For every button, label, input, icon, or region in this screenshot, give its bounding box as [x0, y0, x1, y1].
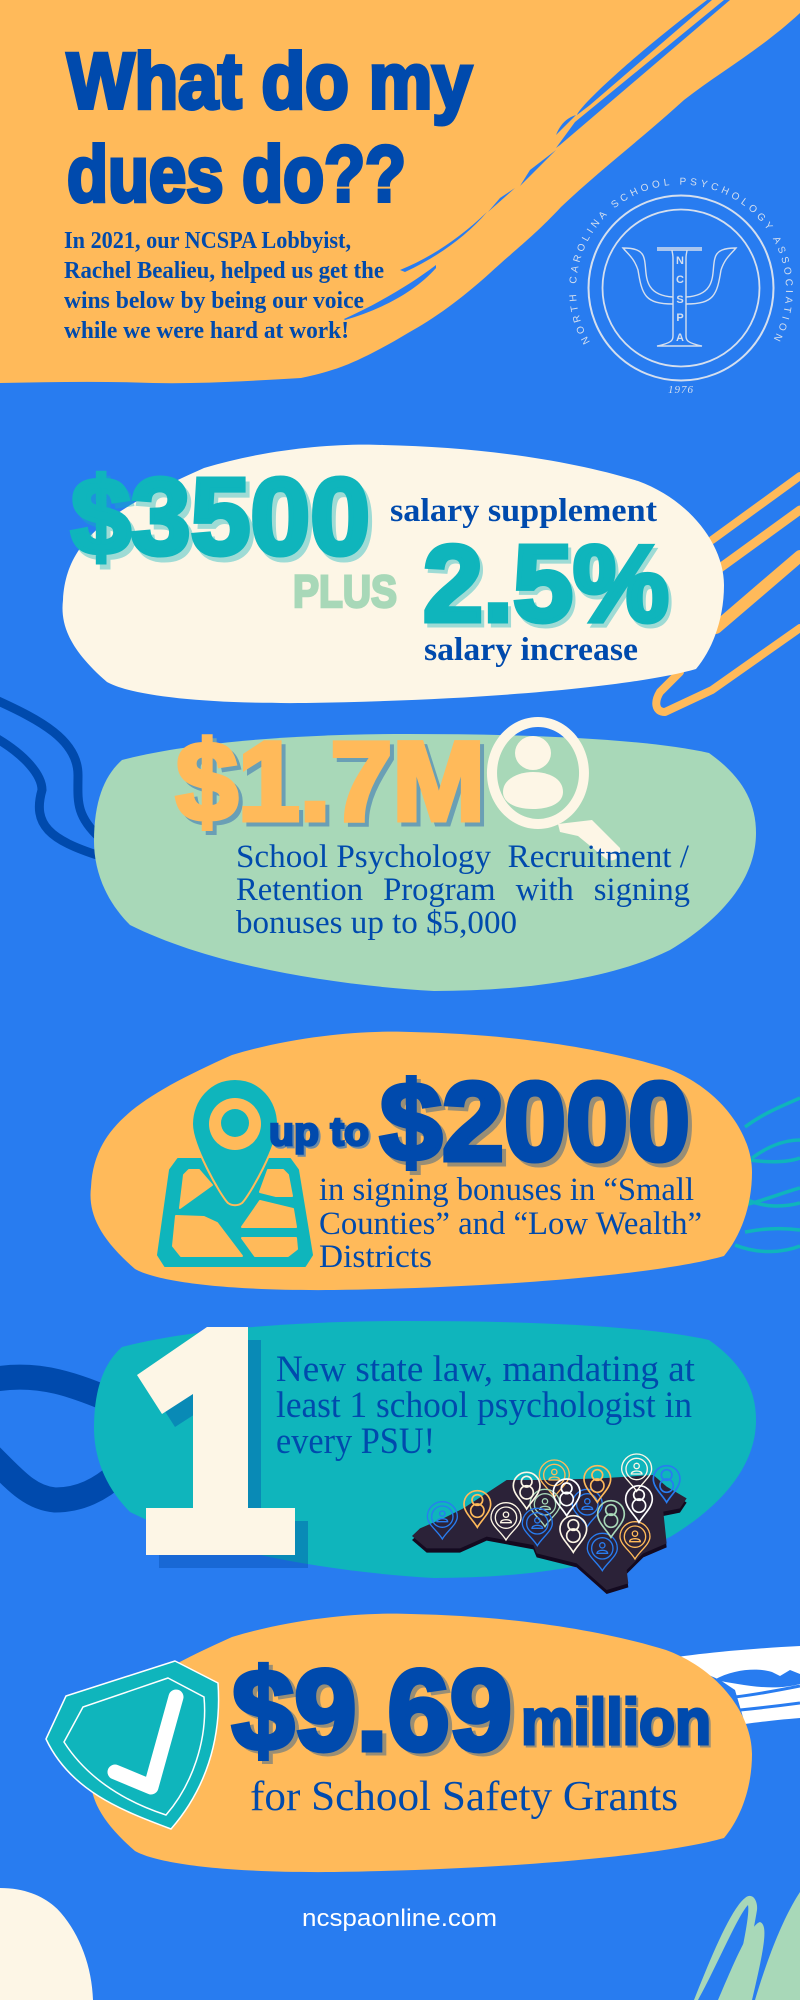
stat: $9.69: $9.69 [232, 1647, 512, 1775]
text: signing bonuses: Counties” and “Low Wealth” [319, 1206, 702, 1242]
intro text: while we were hard at work! [64, 318, 349, 344]
label: PLUS: PLUS [293, 566, 397, 617]
label: million: million [521, 1685, 711, 1758]
icon: magnifying glass with person [487, 717, 620, 860]
text: recruitment program: Retention Program with signing [236, 872, 690, 908]
decoration: white scribble [670, 1646, 800, 1724]
footer url: ncspaonline.com [302, 1905, 497, 1932]
text: recruitment program: bonuses up to $5,000 [236, 905, 517, 941]
text: signing bonuses: in signing bonuses in “Small [319, 1172, 694, 1208]
panel: school safety blob [91, 1614, 752, 1872]
logo: NCSPA seal: A [676, 332, 684, 344]
logo: NCSPA seal: 1976 [668, 384, 694, 396]
title [67, 36, 472, 218]
logo: NCSPA seal: N [676, 255, 684, 267]
stat: 2.5%: 2.5% [423, 523, 669, 645]
logo: NCSPA seal: P [676, 312, 684, 324]
intro text [64, 228, 384, 344]
text: signing bonuses [319, 1172, 702, 1275]
decoration: teal scribble [735, 1098, 800, 1252]
panel: recruitment blob [94, 734, 756, 991]
panel: salary blob [63, 445, 724, 703]
text: for School Safety Grants: for School Safety Grants [250, 1774, 678, 1820]
panel: state law blob [94, 1321, 756, 1578]
decoration: cream corner shape [0, 1888, 93, 2000]
stat: $3500: $3500 [71, 456, 370, 578]
text: recruitment program: School Psychology Recruitment / [236, 839, 690, 875]
big number 1 [137, 1327, 308, 1568]
text: state law: least 1 school psychologist in [276, 1385, 692, 1426]
text: state law: every PSU! [276, 1421, 435, 1462]
decoration: thick dark blue wave [0, 1377, 120, 1500]
decoration: dark blue waves [0, 700, 100, 856]
label: salary supplement: salary supplement [390, 493, 657, 529]
title: dues do?? [67, 129, 406, 218]
intro text: Rachel Bealieu, helped us get the [64, 258, 384, 284]
panel: signing bonus blob [91, 1032, 752, 1290]
stat: $1.7M: $1.7M [176, 719, 485, 844]
intro text: In 2021, our NCSPA Lobbyist, [64, 228, 351, 254]
logo: NCSPA seal: S [676, 294, 684, 306]
logo: NCSPA seal: C [676, 274, 684, 286]
text: signing bonuses: Districts [319, 1239, 432, 1275]
intro text: wins below by being our voice [64, 288, 364, 314]
label: salary increase: salary increase [424, 632, 638, 668]
header brush shape [0, 0, 800, 383]
title: What do my [67, 36, 472, 125]
map: North Carolina with pins [412, 1454, 687, 1594]
decoration: green brush strokes [694, 1892, 800, 2000]
logo: NCSPA seal: NORTH CAROLINA SCHOOL PSYCHOLOGY ASSOCIATION [569, 178, 793, 345]
stat: $2000: $2000 [380, 1060, 690, 1184]
text: recruitment program [236, 839, 690, 941]
icon: map with location pin [158, 1079, 312, 1266]
icon: shield with check [46, 1661, 219, 1829]
text: state law [276, 1349, 696, 1462]
text: state law: New state law, mandating at [276, 1349, 696, 1390]
decoration: orange scribble [656, 476, 800, 712]
label: up to: up to [269, 1110, 369, 1154]
